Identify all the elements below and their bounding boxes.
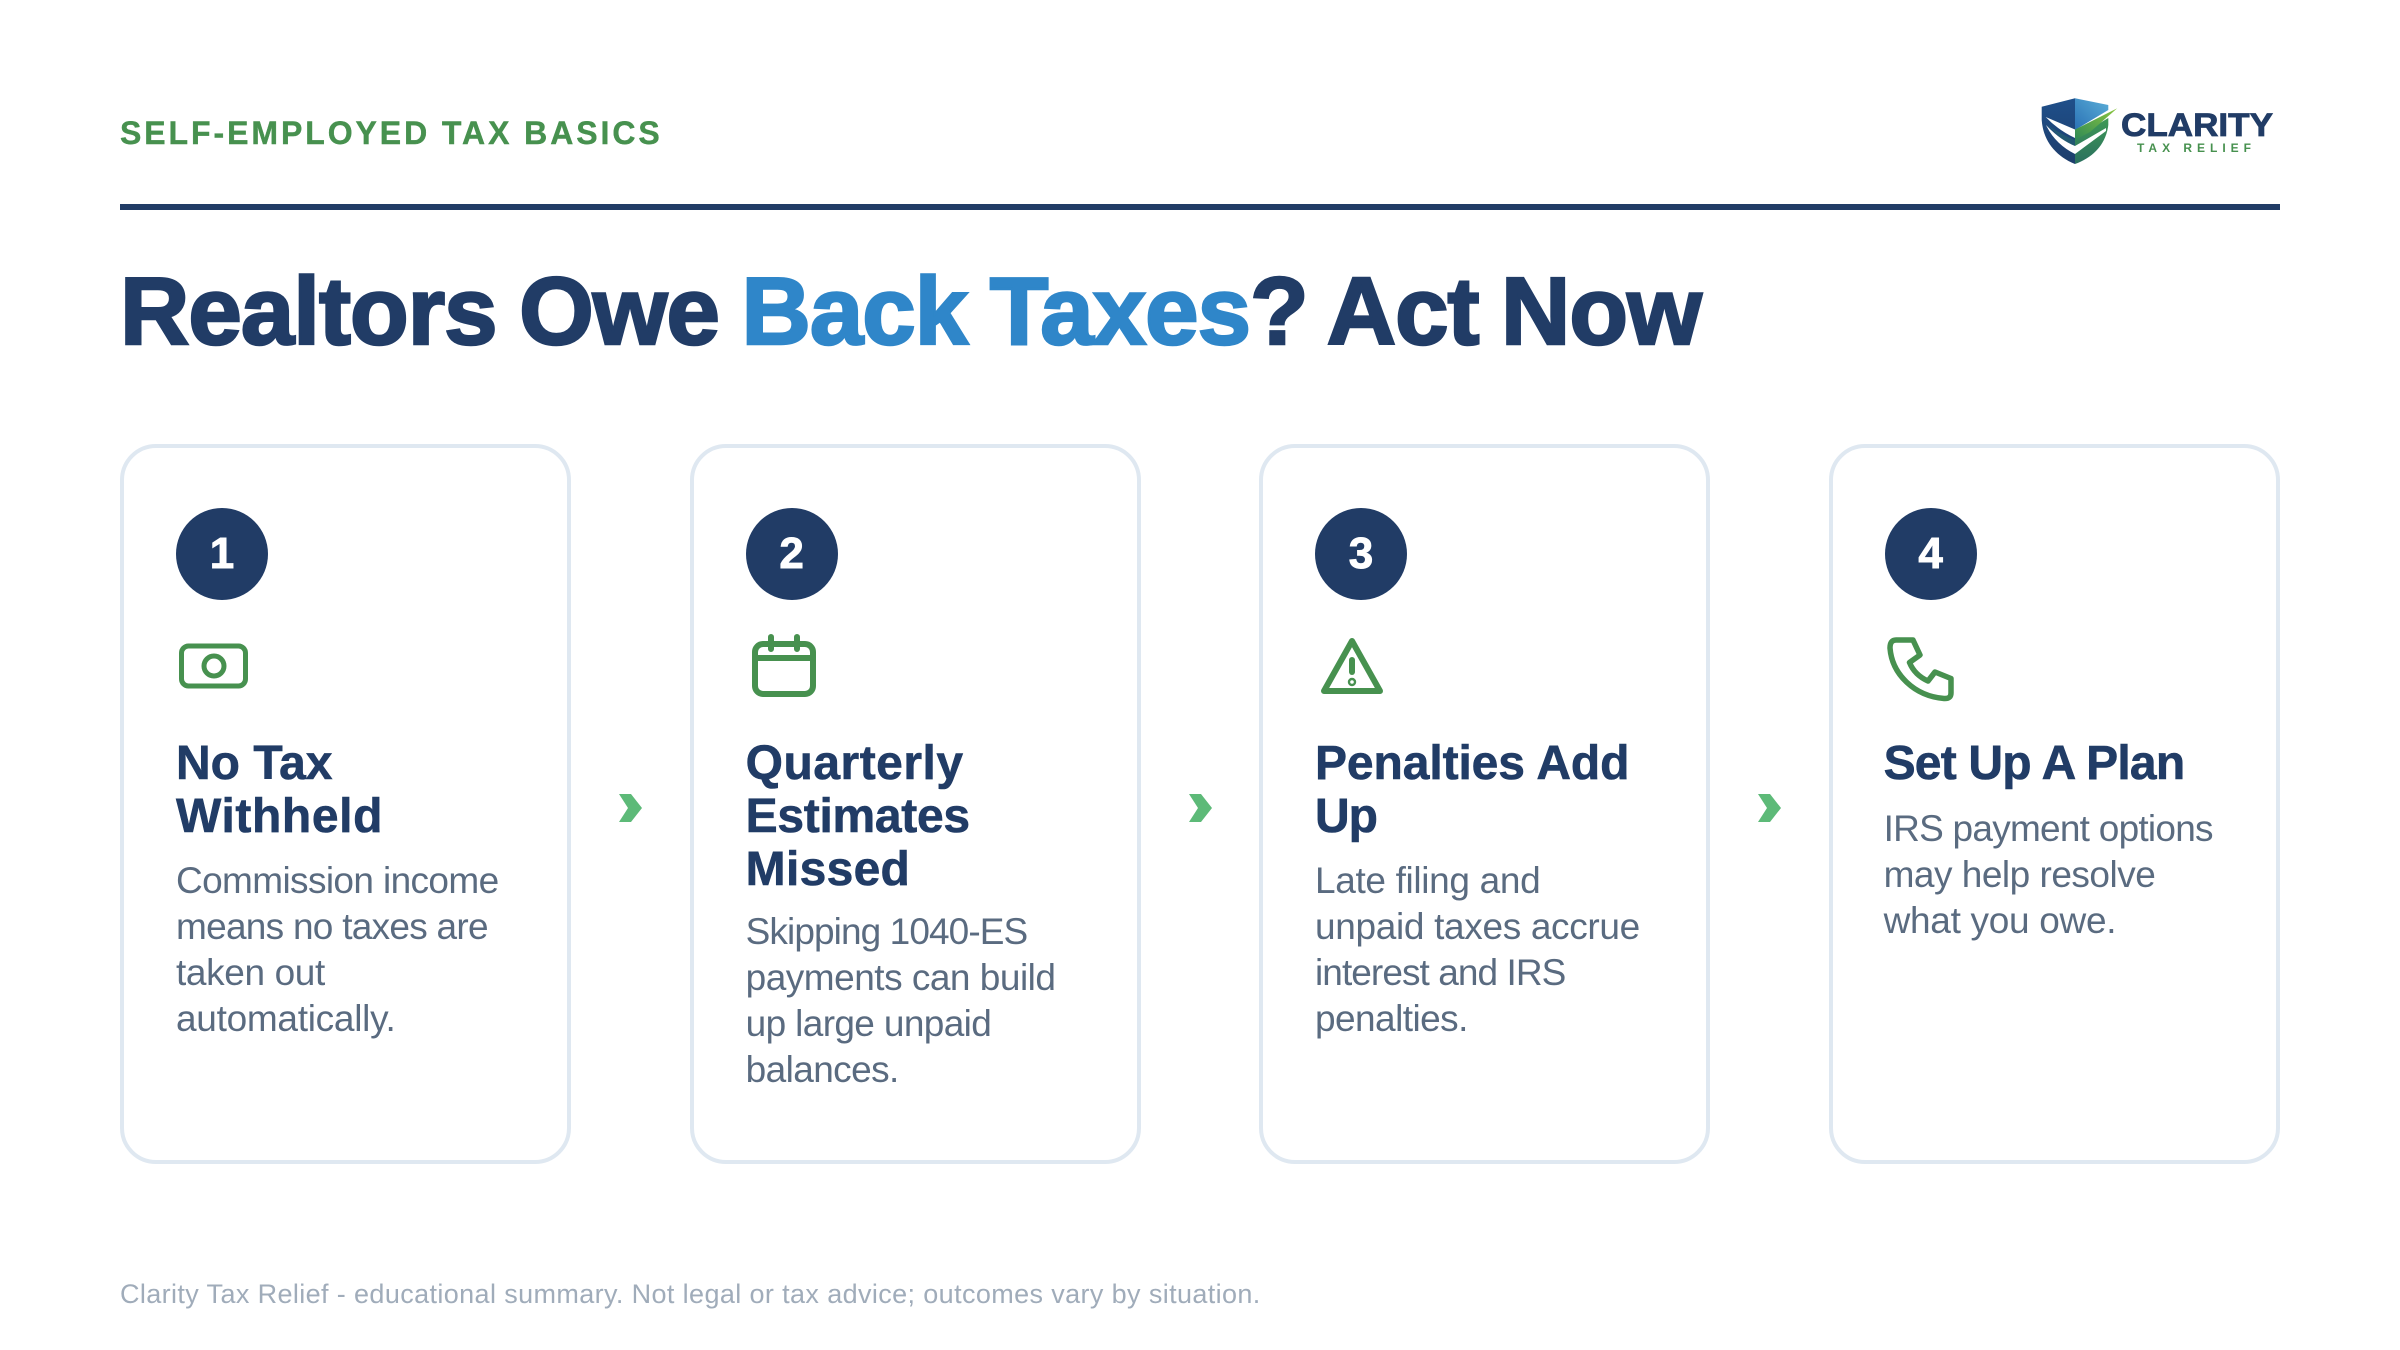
card body: what you owe. [1884, 900, 2116, 940]
icon: phone [1887, 637, 1954, 702]
card heading [1315, 736, 1629, 842]
icon: money [179, 644, 248, 688]
card body: up large unpaid [746, 1002, 991, 1044]
step number 4 [1885, 508, 1977, 600]
card heading [746, 736, 970, 896]
panel: card 3 [1259, 444, 1710, 1164]
panel: card 4 [1829, 444, 2280, 1164]
eyebrow heading: SELF-EMPLOYED TAX BASICS [120, 115, 663, 151]
card body [746, 910, 1055, 1090]
card body: Skipping 1040-ES [746, 910, 1027, 952]
logo: Clarity Tax Relief: CLARITY [2121, 107, 2273, 143]
card body: taken out [176, 952, 325, 992]
logo: Clarity Tax Relief [2042, 98, 2274, 164]
footer disclaimer: Clarity Tax Relief - educational summary. Not legal or tax advice; outcomes vary by situation. [120, 1279, 1261, 1309]
step number 3 [1315, 508, 1407, 600]
card body: automatically. [176, 998, 396, 1038]
card body: IRS payment options [1884, 808, 2213, 848]
arrow 1 [619, 794, 642, 822]
card body: interest and IRS [1315, 952, 1565, 992]
arrow 2 [1189, 794, 1212, 822]
card heading: Withheld [176, 790, 383, 842]
card heading: Set Up A Plan [1884, 736, 2184, 790]
step number 1 [176, 508, 268, 600]
card heading [176, 736, 383, 842]
card body: means no taxes are [176, 906, 488, 946]
logo: Clarity Tax Relief: TAX RELIEF [2137, 141, 2251, 155]
card body [1884, 808, 2213, 940]
card body: penalties. [1315, 998, 1468, 1038]
card body: payments can build [746, 956, 1055, 998]
card heading: Up [1315, 790, 1377, 842]
panel: card 2 [690, 444, 1141, 1164]
panel: card 1 [120, 444, 571, 1164]
card body: may help resolve [1884, 854, 2155, 894]
card body [1315, 860, 1640, 1038]
card body: balances. [746, 1048, 899, 1090]
icon: calendar [752, 634, 816, 697]
card heading: No Tax [176, 736, 332, 790]
step number 3: 3 [1349, 529, 1373, 578]
card heading: Missed [746, 842, 910, 896]
card heading: Penalties Add [1315, 736, 1629, 790]
card heading: Quarterly [746, 736, 964, 790]
title: Realtors Owe Back Taxes? Act Now [120, 258, 1701, 365]
card body: Commission income [176, 860, 499, 900]
step number 1: 1 [210, 529, 234, 578]
step number 2 [746, 508, 838, 600]
arrow 3 [1758, 794, 1781, 822]
step number 4: 4 [1918, 529, 1943, 578]
step number 2: 2 [779, 529, 804, 578]
card body [176, 860, 499, 1038]
card body: Late filing and [1315, 860, 1540, 900]
card heading: Estimates [746, 790, 970, 842]
card body: unpaid taxes accrue [1315, 906, 1640, 946]
icon: warning triangle [1321, 638, 1383, 694]
